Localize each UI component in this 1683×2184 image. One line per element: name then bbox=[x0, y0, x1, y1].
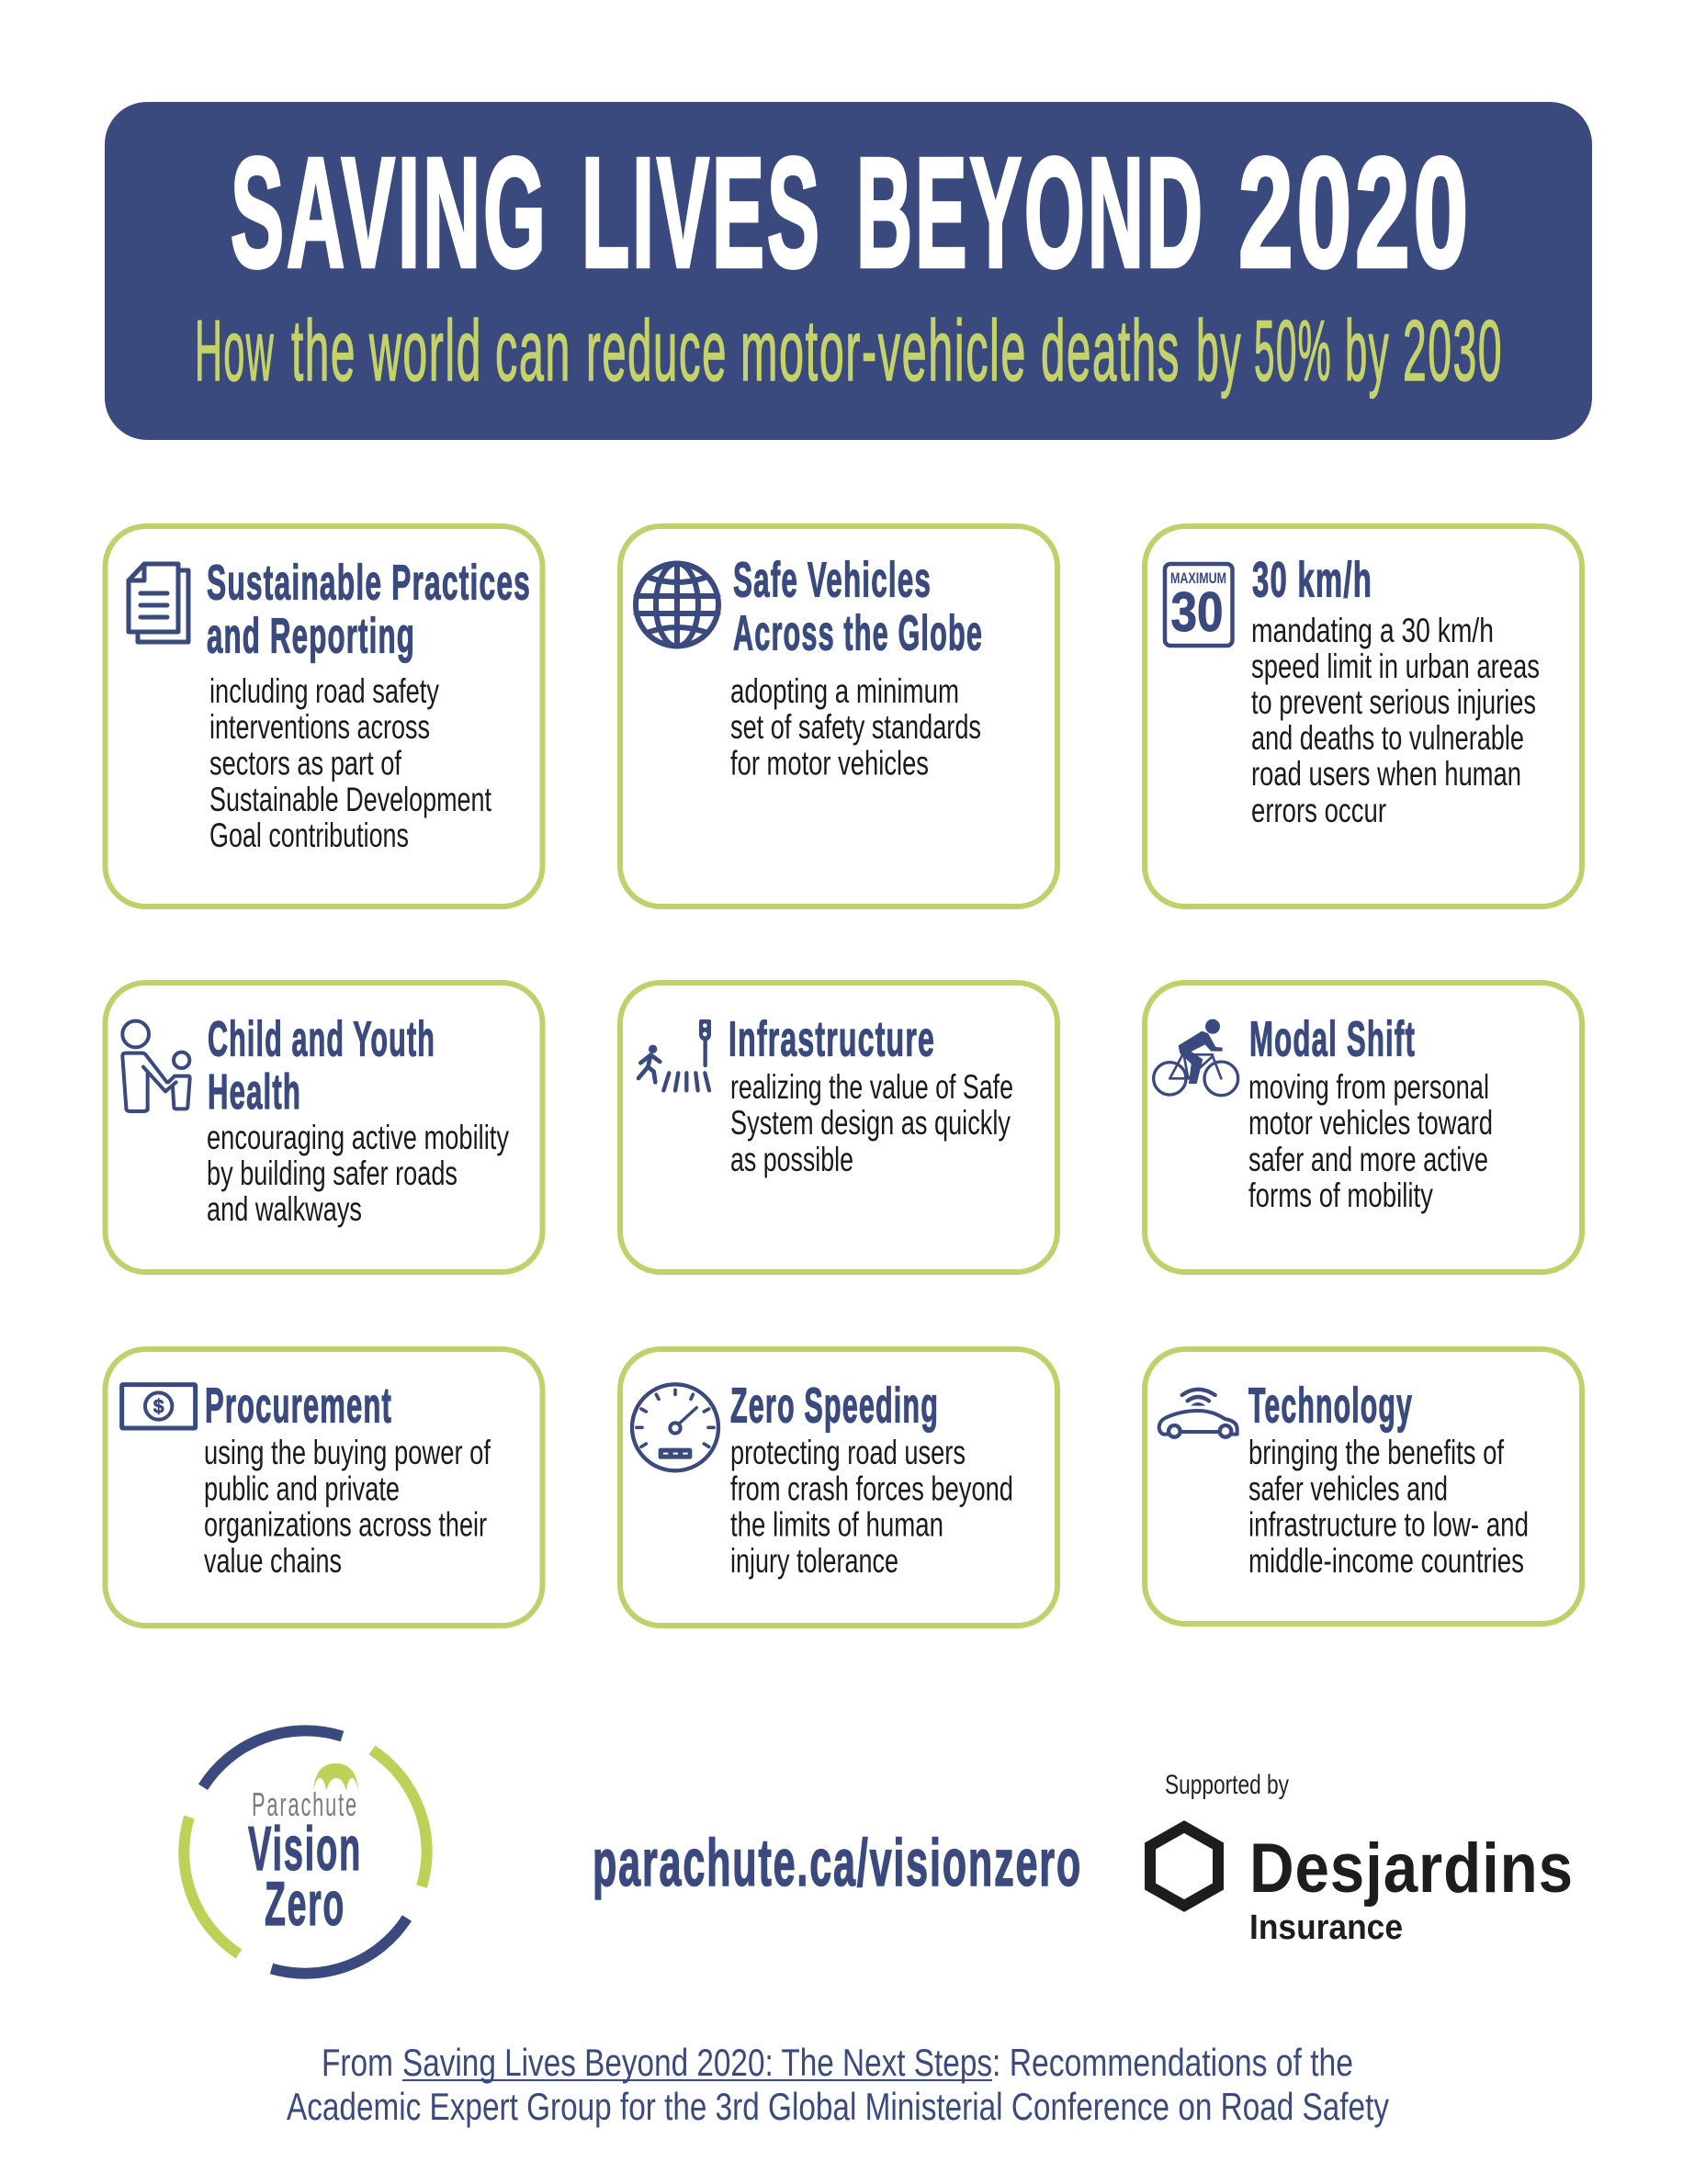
source citation: Saving Lives Beyond 2020: The Next Steps bbox=[402, 2041, 992, 2084]
logo: Parachute Vision Zero bbox=[184, 1730, 427, 1974]
heading: Infrastructure bbox=[729, 1012, 935, 1067]
logo: Parachute Vision Zero: Zero bbox=[265, 1869, 345, 1939]
body text: protecting road users bbox=[730, 1434, 966, 1471]
body text: forms of mobility bbox=[1248, 1176, 1433, 1214]
body text: encouraging active mobility bbox=[207, 1119, 509, 1156]
subtitle: by bbox=[1196, 302, 1242, 399]
subtitle: the bbox=[291, 302, 356, 399]
body text: using the buying power of bbox=[204, 1434, 491, 1471]
icon: connected car bbox=[1159, 1390, 1237, 1437]
body text: Goal contributions bbox=[209, 816, 409, 854]
body text: the limits of human bbox=[730, 1506, 943, 1543]
panel: 30 km/h bbox=[1145, 526, 1582, 906]
body text: speed limit in urban areas bbox=[1251, 647, 1540, 685]
icon: banknote bbox=[122, 1385, 196, 1428]
icon: maximum 30 sign bbox=[1165, 564, 1233, 646]
icon: speedometer bbox=[632, 1384, 718, 1470]
website url: parachute.ca/visionzero bbox=[593, 1827, 1082, 1900]
source citation bbox=[287, 2041, 1389, 2128]
heading bbox=[208, 1012, 435, 1120]
panel: Child and Youth Health bbox=[105, 983, 542, 1272]
subtitle bbox=[195, 302, 1503, 399]
heading: Sustainable Practices bbox=[207, 555, 531, 610]
heading: Procurement bbox=[205, 1378, 392, 1433]
body text: public and private bbox=[204, 1469, 400, 1508]
subtitle: deaths bbox=[1041, 302, 1180, 399]
body text: by building safer roads bbox=[207, 1154, 457, 1192]
panel: Zero Speeding bbox=[620, 1349, 1057, 1626]
body text: adopting a minimum bbox=[730, 672, 959, 710]
body text: infrastructure to low- and bbox=[1248, 1506, 1529, 1543]
body text: including road safety bbox=[209, 672, 439, 710]
body text: System design as quickly bbox=[730, 1104, 1011, 1142]
title: LIVES bbox=[582, 126, 822, 300]
source citation: : Recommendations of the bbox=[992, 2041, 1353, 2084]
panel: Safe Vehicles Across the Globe bbox=[620, 526, 1057, 906]
panel: Sustainable Practices and Reporting bbox=[105, 526, 542, 906]
body text: from crash forces beyond bbox=[730, 1469, 1013, 1508]
panel: Technology bbox=[1145, 1349, 1582, 1624]
body text: mandating a 30 km/h bbox=[1251, 612, 1494, 649]
body text bbox=[730, 672, 981, 782]
body text bbox=[1248, 1434, 1529, 1580]
body text: realizing the value of Safe bbox=[730, 1068, 1013, 1106]
source citation: Academic Expert Group for the 3rd Global Ministerial Conference on Road Safety bbox=[287, 2085, 1389, 2128]
body text: moving from personal bbox=[1248, 1068, 1489, 1106]
icon: adult and child bbox=[122, 1021, 190, 1111]
subtitle: 50% bbox=[1254, 302, 1332, 399]
body text: and walkways bbox=[207, 1190, 362, 1228]
body text: errors occur bbox=[1251, 792, 1386, 829]
body text: for motor vehicles bbox=[730, 744, 929, 782]
subtitle: How bbox=[195, 302, 275, 399]
sponsor: Desjardins Insurance: Supported by bbox=[1165, 1770, 1289, 1800]
body text bbox=[1251, 612, 1540, 829]
header banner bbox=[105, 102, 1592, 440]
heading: 30 km/h bbox=[1252, 553, 1372, 608]
body text: road users when human bbox=[1251, 755, 1521, 793]
source citation: From bbox=[322, 2041, 393, 2084]
sponsor: Desjardins Insurance: Insurance bbox=[1249, 1908, 1403, 1947]
subtitle: motor-vehicle bbox=[740, 302, 1027, 399]
body text: sectors as part of bbox=[209, 744, 402, 782]
heading: Modal Shift bbox=[1249, 1012, 1416, 1067]
icon: banknote: $ bbox=[153, 1396, 164, 1418]
body text: motor vehicles toward bbox=[1248, 1104, 1493, 1142]
sponsor: Desjardins Insurance: Desjardins bbox=[1249, 1829, 1574, 1908]
body text bbox=[204, 1434, 491, 1580]
logo: Parachute Vision Zero: Vision bbox=[248, 1814, 362, 1884]
header banner: 2030 bbox=[1403, 302, 1503, 399]
logo: Parachute Vision Zero: Parachute bbox=[252, 1785, 358, 1823]
heading: Child and Youth bbox=[208, 1012, 435, 1067]
title: 2020 bbox=[1238, 126, 1472, 300]
body text: bringing the benefits of bbox=[1248, 1434, 1505, 1471]
heading: Safe Vehicles bbox=[733, 553, 932, 608]
icon: maximum 30 sign: MAXIMUM bbox=[1170, 569, 1226, 587]
body text: interventions across bbox=[209, 708, 430, 746]
body text bbox=[1248, 1068, 1493, 1214]
body text: and deaths to vulnerable bbox=[1251, 719, 1524, 757]
body text bbox=[730, 1434, 1013, 1580]
body text: Sustainable Development bbox=[209, 781, 492, 818]
body text: middle-income countries bbox=[1248, 1542, 1524, 1580]
icon: pedestrian crossing bbox=[638, 1019, 711, 1090]
heading: and Reporting bbox=[207, 608, 415, 663]
heading bbox=[207, 555, 531, 663]
icon: maximum 30 sign: 30 bbox=[1170, 581, 1224, 643]
icon: globe bbox=[636, 564, 718, 647]
subtitle: by bbox=[1345, 302, 1390, 399]
subtitle: can bbox=[495, 302, 571, 399]
body text bbox=[209, 672, 492, 854]
body text: as possible bbox=[730, 1141, 853, 1178]
body text bbox=[730, 1068, 1013, 1178]
body text: safer vehicles and bbox=[1248, 1469, 1448, 1508]
heading: Zero Speeding bbox=[730, 1378, 939, 1433]
icon: cyclist bbox=[1154, 1019, 1238, 1096]
body text: set of safety standards bbox=[730, 708, 981, 746]
body text: safer and more active bbox=[1248, 1141, 1488, 1178]
body text: to prevent serious injuries bbox=[1251, 683, 1536, 721]
body text: value chains bbox=[204, 1542, 342, 1580]
heading: Across the Globe bbox=[733, 606, 983, 661]
body text: injury tolerance bbox=[730, 1542, 898, 1580]
body text bbox=[207, 1119, 509, 1228]
icon: documents bbox=[129, 564, 188, 642]
title: BEYOND bbox=[856, 126, 1205, 300]
panel: Procurement bbox=[105, 1349, 542, 1626]
subtitle: reduce bbox=[586, 302, 728, 399]
heading bbox=[733, 553, 983, 661]
heading: Health bbox=[208, 1064, 301, 1120]
title bbox=[231, 126, 1472, 300]
sponsor: Desjardins Insurance bbox=[1150, 1770, 1574, 1947]
heading: Technology bbox=[1248, 1378, 1413, 1433]
subtitle: world bbox=[368, 302, 482, 399]
body text: organizations across their bbox=[204, 1506, 487, 1543]
title: SAVING bbox=[231, 126, 548, 300]
panel: Infrastructure bbox=[620, 983, 1057, 1272]
panel: Modal Shift bbox=[1145, 983, 1582, 1272]
